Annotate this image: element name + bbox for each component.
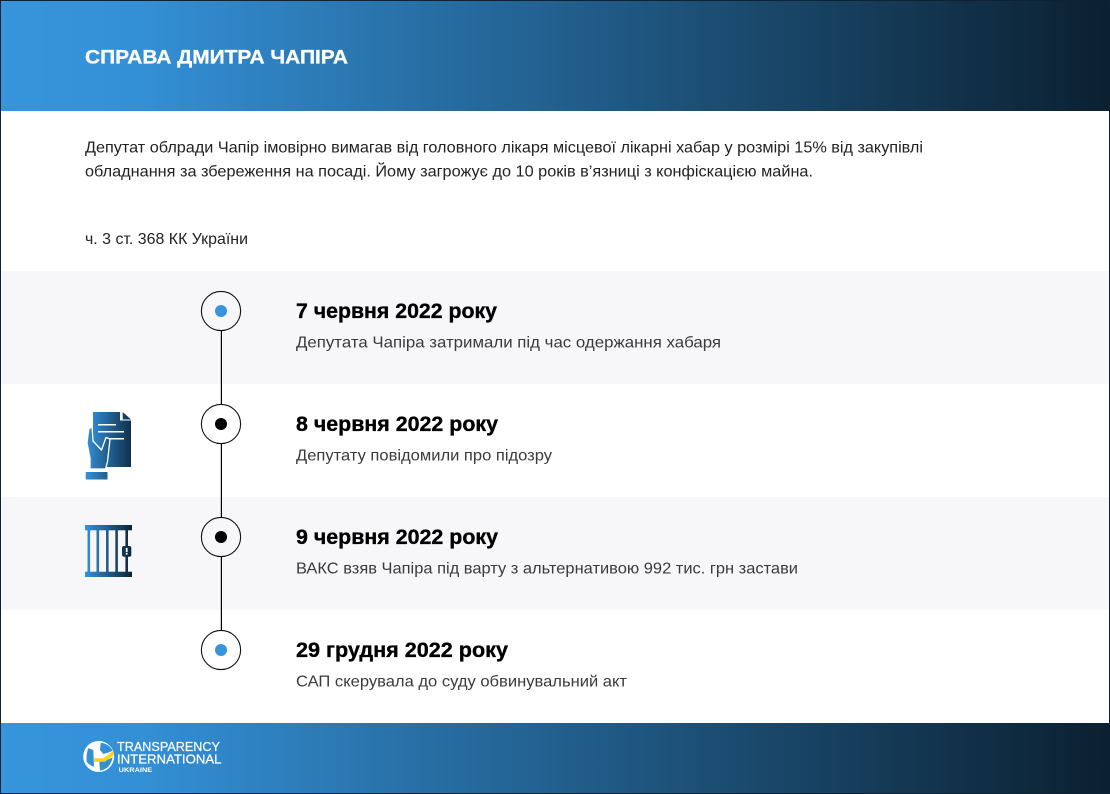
case description <box>85 140 923 180</box>
event 1: 7 червня 2022 року <box>296 300 497 323</box>
event 4: 29 грудня 2022 року <box>296 639 508 662</box>
timeline band 1 <box>0 271 1110 384</box>
event 2 <box>296 413 552 464</box>
event 2: Депутату повідомили про підозру <box>296 447 552 464</box>
event 1 <box>296 300 721 351</box>
logo: Transparency International Ukraine <box>83 739 222 774</box>
header band <box>0 0 1110 111</box>
timeline marker 3 <box>201 517 241 557</box>
event 4 <box>296 639 628 690</box>
logo: Transparency International Ukraine: UKRAINE <box>119 767 153 774</box>
logo: Transparency International Ukraine: INTERNATIONAL <box>117 752 222 766</box>
event 2: 8 червня 2022 року <box>296 413 498 436</box>
timeline marker 1 <box>201 291 241 331</box>
legal article: ч. 3 ст. 368 КК України <box>85 231 248 248</box>
event 3: 9 червня 2022 року <box>296 526 498 549</box>
logo emblem <box>83 741 114 772</box>
timeline connector <box>220 331 222 630</box>
case description: Депутат облради Чапір імовірно вимагав від головного лікаря місцевої лікарні хабар у розмірі 15% від закупівлі <box>85 140 923 156</box>
event 1: Депутата Чапіра затримали під час одержання хабаря <box>296 334 721 351</box>
footer band <box>0 723 1110 794</box>
timeline marker 2 <box>201 404 241 444</box>
case description: обладнання за збереження на посаді. Йому загрожує до 10 років в’язниці з конфіскацією майна. <box>85 162 813 180</box>
event 4: САП скерувала до суду обвинувальний акт <box>296 673 628 690</box>
event 3: ВАКС взяв Чапіра під варту з альтернативою 992 тис. грн застави <box>296 560 798 577</box>
icon: prison bars <box>85 525 132 577</box>
timeline band 3 <box>0 497 1110 610</box>
title: СПРАВА ДМИТРА ЧАПІРА <box>85 46 348 68</box>
icon: hand holding document <box>86 412 131 480</box>
event 3 <box>296 526 798 577</box>
timeline marker 4 <box>201 630 241 670</box>
logo: Transparency International Ukraine: TRANSPARENCY <box>117 739 220 754</box>
